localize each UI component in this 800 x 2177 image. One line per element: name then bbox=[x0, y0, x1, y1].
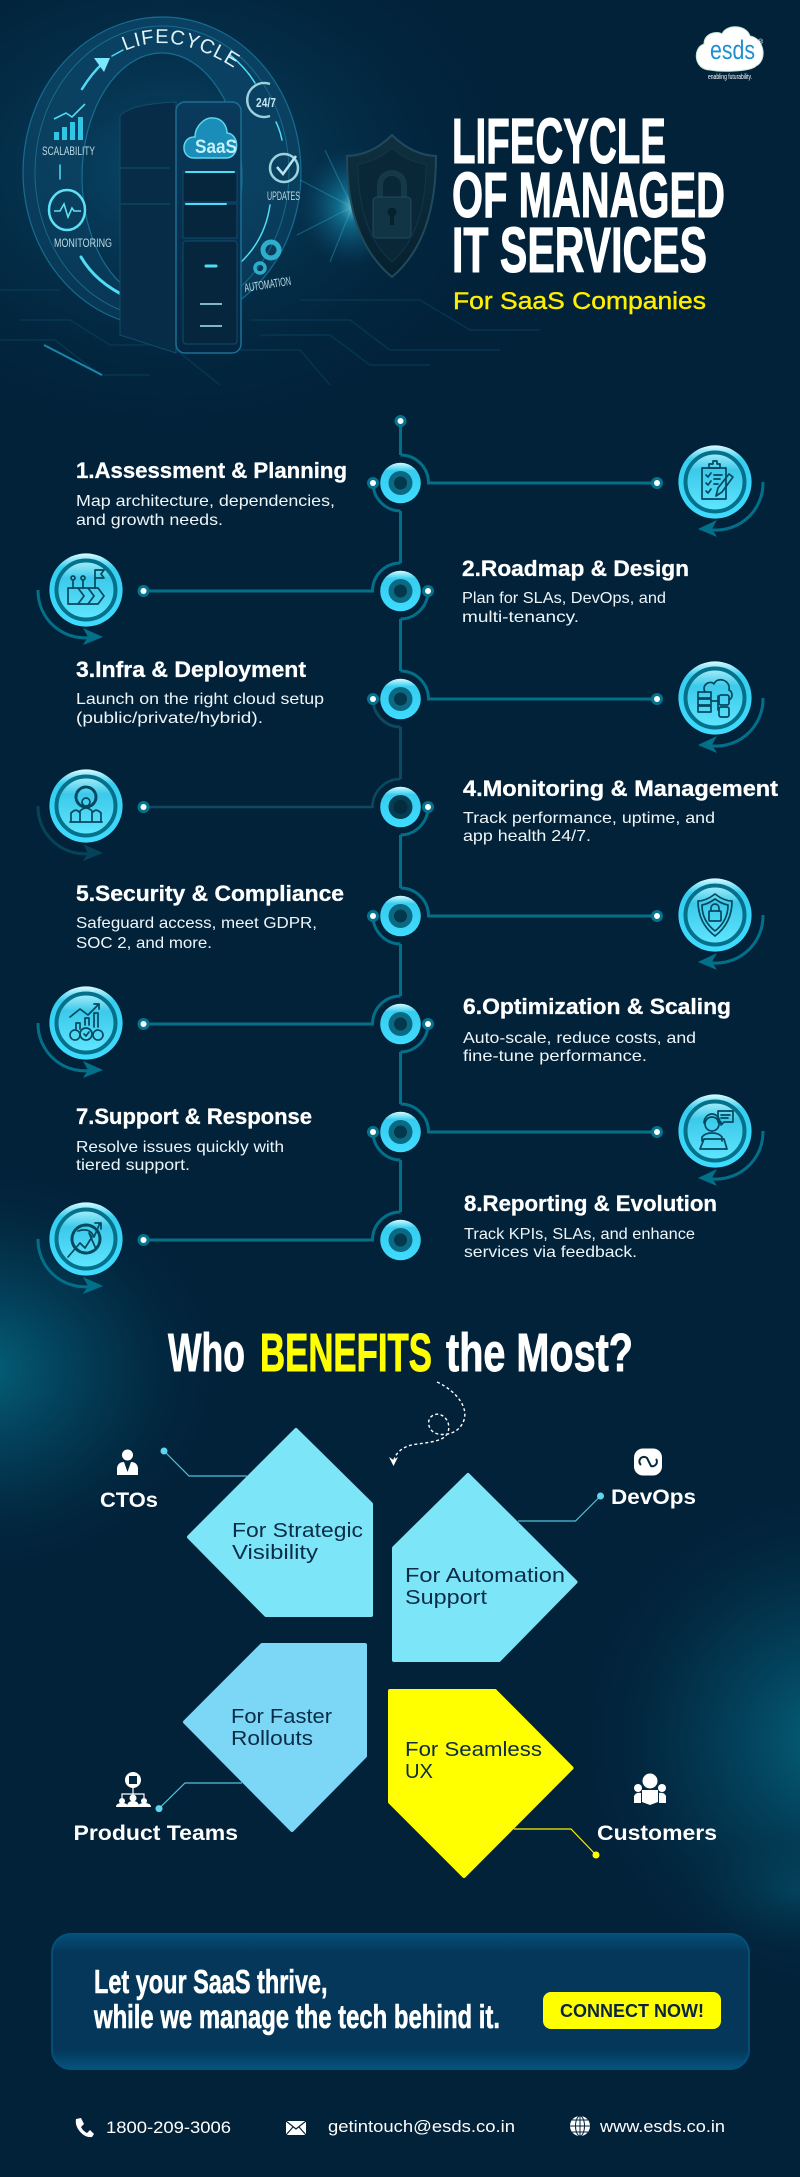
benefit card: seamless UX bbox=[390, 1691, 572, 1876]
icon: automation gears bbox=[255, 242, 279, 273]
callout: DevOps: DevOps bbox=[611, 1486, 696, 1509]
icon: 24/7 bbox=[247, 83, 276, 117]
step 8: services via feedback. bbox=[464, 1244, 637, 1261]
callout: customers bbox=[514, 1774, 717, 1858]
step 1 bbox=[76, 445, 763, 537]
step 4 bbox=[38, 769, 779, 861]
callout: product teams bbox=[74, 1772, 242, 1845]
ring highlight arcs bbox=[60, 50, 282, 305]
step 2: multi-tenancy. bbox=[462, 609, 579, 626]
text: 5.Security & Compliance bbox=[76, 881, 344, 906]
step 2: Plan for SLAs, DevOps, and bbox=[462, 590, 666, 607]
dashed arrow bbox=[389, 1382, 465, 1466]
benefit card: faster rollouts: Rollouts bbox=[231, 1727, 313, 1750]
callout: CTOs: CTOs bbox=[100, 1489, 158, 1512]
title: LIFECYCLE bbox=[452, 105, 666, 177]
icon: scalability bars bbox=[54, 104, 85, 140]
label: monitoring: MONITORING bbox=[54, 236, 112, 250]
text: 3.Infra & Deployment bbox=[76, 657, 307, 682]
contact: email: getintouch@esds.co.in bbox=[328, 2117, 515, 2136]
arrow bbox=[38, 1239, 94, 1287]
step 4: app health 24/7. bbox=[463, 828, 591, 845]
connector bbox=[144, 779, 400, 807]
text: 8.Reporting & Evolution bbox=[464, 1191, 717, 1216]
icon: customers group bbox=[634, 1774, 666, 1805]
step 8: Track KPIs, SLAs, and enhance bbox=[464, 1226, 695, 1243]
CTA button bbox=[543, 1992, 721, 2029]
arrow bbox=[38, 806, 94, 854]
arrow bbox=[706, 1131, 763, 1179]
step 6: fine-tune performance. bbox=[463, 1048, 647, 1065]
arrow bbox=[706, 482, 763, 530]
benefit card: strategic visibility: Visibility bbox=[232, 1541, 319, 1564]
icon: 24/7: 24/7 bbox=[256, 95, 276, 110]
benefit card: automation support bbox=[394, 1475, 576, 1660]
benefit card: faster rollouts: For Faster bbox=[231, 1705, 332, 1728]
label: updates: UPDATES bbox=[267, 189, 300, 203]
arrow bbox=[38, 1023, 94, 1071]
step 7: Resolve issues quickly with bbox=[76, 1139, 284, 1156]
icon: executive bbox=[117, 1450, 138, 1475]
title bbox=[452, 105, 725, 286]
label: automation: AUTOMATION bbox=[243, 274, 292, 295]
benefit card: seamless UX: For Seamless bbox=[405, 1738, 542, 1761]
icon: gear with growth arrow bbox=[68, 1223, 101, 1257]
logo: esds: ® bbox=[758, 38, 764, 46]
connector bbox=[144, 996, 428, 1052]
ring band bbox=[23, 17, 301, 327]
icon: optimization chart bbox=[70, 1004, 103, 1040]
step 4: Track performance, uptime, and bbox=[463, 810, 715, 827]
heading: who benefits: BENEFITS bbox=[260, 1323, 432, 1383]
callout: product teams: Product Teams bbox=[74, 1822, 238, 1845]
server tower bbox=[120, 102, 241, 353]
heading: who benefits: the Most? bbox=[446, 1323, 633, 1383]
connector bbox=[373, 455, 657, 511]
step 3 bbox=[76, 657, 763, 753]
logo: esds: enabling futurability. bbox=[708, 74, 752, 81]
heading: who benefits bbox=[168, 1323, 633, 1383]
step 3: (public/private/hybrid). bbox=[76, 710, 263, 727]
cloud SaaS badge bbox=[184, 118, 237, 158]
icon: cloud servers bbox=[698, 680, 732, 717]
step 8 bbox=[38, 1191, 717, 1294]
label: scalability: SCALABILITY bbox=[42, 144, 95, 158]
contact: website: www.esds.co.in bbox=[599, 2117, 725, 2136]
step 3: Launch on the right cloud setup bbox=[76, 691, 324, 708]
arrow bbox=[706, 698, 763, 746]
icon: monitoring bbox=[49, 190, 85, 230]
circuit board traces bbox=[0, 290, 540, 385]
step 1: and growth needs. bbox=[76, 512, 223, 529]
cloud SaaS badge: SaaS bbox=[195, 137, 237, 158]
text: 6.Optimization & Scaling bbox=[463, 994, 731, 1019]
step 5 bbox=[76, 878, 763, 970]
connector bbox=[144, 563, 428, 619]
step 6 bbox=[38, 986, 731, 1078]
connector bbox=[373, 1104, 657, 1160]
connector bbox=[144, 1212, 400, 1240]
benefit card: strategic visibility: For Strategic bbox=[232, 1519, 363, 1542]
subtitle: For SaaS Companies bbox=[453, 288, 706, 315]
icon: support agent bbox=[700, 1111, 733, 1149]
hero shield with lock bbox=[297, 135, 436, 277]
icon: roadmap bbox=[68, 570, 104, 604]
step 5: Safeguard access, meet GDPR, bbox=[76, 915, 317, 932]
benefit card: automation support: For Automation bbox=[405, 1564, 565, 1587]
callout: customers: Customers bbox=[597, 1822, 717, 1845]
text: 4.Monitoring & Management bbox=[463, 776, 779, 801]
arrow bbox=[706, 915, 763, 963]
contact: phone: 1800-209-3006 bbox=[106, 2118, 231, 2137]
step 6: Auto-scale, reduce costs, and bbox=[463, 1030, 696, 1047]
benefit card: strategic visibility bbox=[189, 1430, 371, 1615]
benefit card: faster rollouts bbox=[185, 1645, 365, 1830]
timeline start dot bbox=[394, 415, 406, 427]
icon: devops loop bbox=[634, 1448, 662, 1476]
connector bbox=[373, 888, 657, 944]
text: 7.Support & Response bbox=[76, 1104, 312, 1129]
step 1: Map architecture, dependencies, bbox=[76, 493, 335, 510]
CTA text bbox=[93, 1963, 500, 2035]
CTA text: while we manage the tech behind it. bbox=[93, 1998, 500, 2035]
benefit card: automation support: Support bbox=[405, 1586, 487, 1609]
CTA text: Let your SaaS thrive, bbox=[94, 1963, 328, 2000]
text: 2.Roadmap & Design bbox=[462, 556, 689, 581]
icon: clipboard checklist bbox=[702, 461, 733, 499]
hero illustration: lifecycle ring and server bbox=[0, 16, 540, 386]
icon: gear with people bbox=[70, 787, 102, 822]
text: 1.Assessment & Planning bbox=[76, 458, 347, 483]
arrow on ring bbox=[94, 58, 110, 72]
callout: CTOs bbox=[100, 1448, 247, 1512]
timeline spine bbox=[399, 421, 402, 1212]
callout: DevOps bbox=[518, 1448, 696, 1521]
benefit card: seamless UX: UX bbox=[405, 1760, 433, 1783]
step 5: SOC 2, and more. bbox=[76, 935, 212, 952]
step 7: tiered support. bbox=[76, 1157, 190, 1174]
heading: who benefits: Who bbox=[168, 1323, 245, 1383]
step 2 bbox=[38, 553, 689, 645]
CTA panel bbox=[51, 1933, 750, 2070]
logo: esds bbox=[696, 27, 764, 81]
connector bbox=[400, 671, 657, 699]
logo: esds: esds bbox=[710, 35, 755, 65]
arrow bbox=[38, 590, 94, 638]
icon: security shield bbox=[698, 894, 732, 936]
icon: org gear bbox=[116, 1772, 151, 1807]
CTA button: CONNECT NOW! bbox=[560, 2001, 704, 2021]
ring title: LIFECYCLE bbox=[122, 29, 240, 68]
icon: updates check bbox=[270, 154, 298, 182]
step 7 bbox=[76, 1094, 763, 1186]
